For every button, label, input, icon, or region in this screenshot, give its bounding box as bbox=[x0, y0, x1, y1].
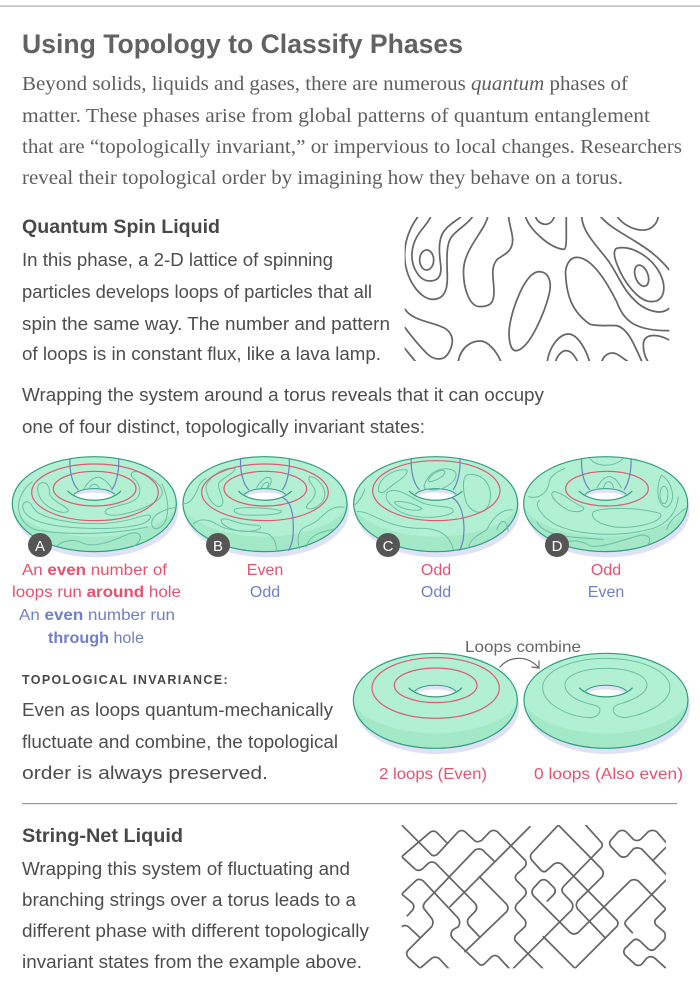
title: Using Topology to Classify Phases bbox=[22, 29, 463, 59]
label: 0 loops: 0 loops (Also even) bbox=[534, 766, 683, 783]
text: quantum spin liquid description: of loops is in constant flux, like a lava lamp. bbox=[22, 344, 381, 364]
intro paragraph bbox=[22, 73, 682, 189]
badge B bbox=[206, 533, 230, 557]
torus C bbox=[354, 457, 520, 557]
intro paragraph: that are “topologically invariant,” or impervious to local changes. Researchers bbox=[22, 136, 682, 158]
badge D: D bbox=[552, 538, 563, 555]
caption D: Odd bbox=[591, 562, 621, 579]
caption B: Odd bbox=[250, 584, 280, 601]
intro paragraph: reveal their topological order by imagining how they behave on a torus. bbox=[22, 167, 623, 189]
text: wrapping the system: one of four distinct, topologically invariant states: bbox=[22, 417, 425, 437]
text: string-net description: Wrapping this system of fluctuating and bbox=[22, 859, 350, 879]
heading: string-net liquid: String-Net Liquid bbox=[22, 826, 183, 847]
label: loops combine: Loops combine bbox=[465, 639, 581, 656]
pattern: string net bbox=[402, 825, 666, 968]
torus A bbox=[12, 457, 178, 557]
caption C: Odd bbox=[421, 562, 451, 579]
badge C: C bbox=[383, 538, 394, 555]
caption A: An even number of bbox=[22, 562, 168, 579]
intro paragraph: Beyond solids, liquids and gases, there are numerous quantum phases of bbox=[22, 73, 628, 95]
torus: zero loops bbox=[524, 653, 690, 754]
badge C bbox=[376, 533, 400, 557]
text: invariance description bbox=[22, 700, 338, 783]
label: 2 loops: 2 loops (Even) bbox=[379, 766, 487, 783]
text: invariance description: Even as loops quantum-mechanically bbox=[22, 700, 333, 720]
text: quantum spin liquid description bbox=[22, 250, 390, 364]
pattern: lava lamp loops bbox=[405, 217, 669, 361]
text: quantum spin liquid description: particles develops loops of particles that all bbox=[22, 282, 372, 302]
badge A: A bbox=[35, 538, 45, 555]
badge D bbox=[545, 533, 569, 557]
heading: quantum spin liquid: Quantum Spin Liquid bbox=[22, 217, 220, 238]
caption C bbox=[421, 562, 451, 601]
badge B: B bbox=[213, 538, 223, 555]
text: string-net description: branching strings over a torus leads to a bbox=[22, 890, 357, 910]
caption C: Odd bbox=[421, 584, 451, 601]
text: invariance description: fluctuate and combine, the topological bbox=[22, 732, 338, 752]
torus: two loops bbox=[353, 653, 519, 754]
caption A: loops run around hole bbox=[12, 584, 181, 601]
caption A: through hole bbox=[48, 630, 144, 647]
caption D bbox=[588, 562, 624, 601]
torus B bbox=[183, 457, 349, 557]
text: string-net description bbox=[22, 859, 369, 972]
text: quantum spin liquid description: In this phase, a 2-D lattice of spinning bbox=[22, 250, 333, 270]
caption B bbox=[247, 562, 283, 601]
divider bbox=[22, 803, 677, 804]
text: wrapping the system: Wrapping the system around a torus reveals that it can occupy bbox=[22, 385, 544, 405]
subheading: topological invariance: TOPOLOGICAL INVARIANCE: bbox=[22, 672, 229, 687]
text: wrapping the system bbox=[22, 385, 544, 437]
text: quantum spin liquid description: spin the same way. The number and pattern bbox=[22, 314, 390, 334]
top rule bbox=[0, 6, 700, 7]
text: invariance description: order is always preserved. bbox=[22, 763, 268, 783]
arrow: loops combine bbox=[500, 658, 539, 668]
torus D bbox=[524, 457, 690, 557]
caption A bbox=[12, 562, 181, 647]
intro paragraph: matter. These phases arise from global patterns of quantum entanglement bbox=[22, 105, 650, 127]
caption B: Even bbox=[247, 562, 283, 579]
caption A: An even number run bbox=[19, 607, 175, 624]
caption D: Even bbox=[588, 584, 624, 601]
badge A bbox=[28, 533, 52, 557]
text: string-net description: different phase with different topologically bbox=[22, 921, 369, 941]
text: string-net description: invariant states from the example above. bbox=[22, 952, 362, 972]
